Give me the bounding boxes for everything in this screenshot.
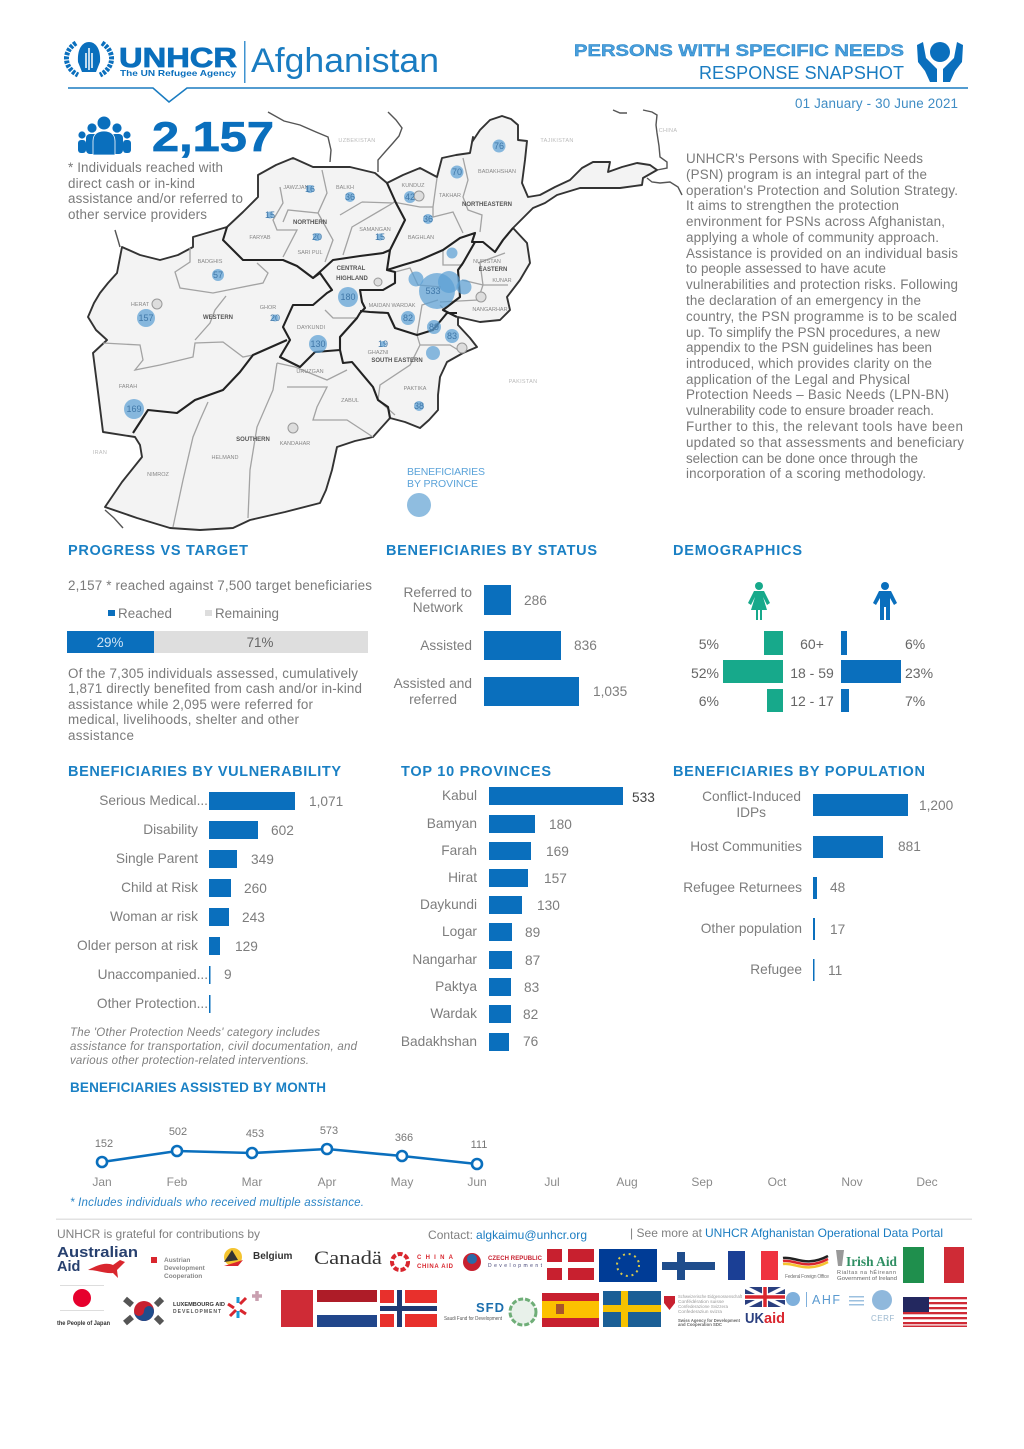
key figure note: direct cash or in-kind: [68, 176, 195, 191]
chart: beneficiaries assisted by month: 111: [471, 1139, 487, 1151]
chart: demographics: [673, 543, 933, 712]
chart footnote: * Includes individuals who received multiple assistance.: [70, 1197, 364, 1209]
progress bar: [67, 631, 368, 653]
chart: demographics: DEMOGRAPHICS: [673, 543, 802, 559]
map labels: 82: [403, 313, 413, 323]
map labels: PAKTIKA: [404, 386, 427, 392]
map labels: NIMROZ: [147, 472, 169, 478]
logo: Irish Aid: Rialtas na hÉireann: [837, 1269, 896, 1276]
map labels: URUZGAN: [296, 369, 324, 375]
map labels: 83: [447, 331, 457, 341]
chart: beneficiaries assisted by month: [70, 1080, 938, 1209]
header: [66, 41, 968, 111]
footer text: | See more at: [630, 1226, 703, 1240]
flag: EU: [599, 1249, 657, 1282]
map labels: 15: [375, 232, 385, 242]
chart: beneficiaries by population: [673, 764, 954, 981]
flag: USA: [903, 1297, 967, 1327]
map labels: 130: [310, 339, 326, 349]
icon: female: [748, 582, 770, 620]
map labels: 20: [312, 232, 322, 242]
chart: beneficiaries assisted by month: May: [391, 1175, 413, 1189]
logo: Swiss cooperation: Confédération suisse: [678, 1299, 725, 1304]
chart: top 10 provinces: TOP 10 PROVINCES: [401, 764, 551, 780]
chart: beneficiaries assisted by month: Apr: [318, 1175, 336, 1189]
logo: Austrian Development Cooperation: Cooperation: [164, 1273, 202, 1280]
intro paragraph: incorporation of a scoring methodology.: [686, 466, 926, 481]
chart: beneficiaries by vulnerability: 243: [242, 910, 265, 925]
footer text: UNHCR is grateful for contributions by: [57, 1227, 260, 1241]
chart: beneficiaries by population: Other population: [701, 921, 802, 936]
intro paragraph: It aims to strengthen the protection: [686, 198, 899, 213]
logo: Germany: [783, 1256, 829, 1280]
map labels: SAMANGAN: [359, 227, 391, 233]
chart: demographics: 23%: [905, 665, 933, 681]
logo: Australian Aid: Australian: [57, 1245, 138, 1261]
chart: beneficiaries assisted by month: Oct: [768, 1175, 787, 1189]
chart: demographics: 6%: [699, 693, 719, 709]
panel: progress vs target: 2,157 * reached against 7,500 target beneficiaries: [68, 578, 372, 593]
logo: Luxembourg aid: DEVELOPMENT: [173, 1309, 221, 1315]
intro paragraph: applying a whole of community approach.: [686, 230, 939, 245]
map labels: TAJIKISTAN: [540, 138, 574, 144]
map labels: JAWZJAN: [283, 185, 309, 191]
logo: Saudi Fund for Development: SFD: [476, 1300, 505, 1315]
chart: beneficiaries assisted by month: 453: [246, 1128, 264, 1140]
flag: Norway: [380, 1290, 437, 1327]
chart: top 10 provinces: 169: [546, 844, 569, 859]
intro paragraph: introduced, which provides clarity on the: [686, 356, 932, 371]
footer text: algkaimu@unhcr.org: [476, 1228, 587, 1242]
map labels: GHAZNI: [368, 350, 389, 356]
panel: progress vs target: [67, 543, 372, 743]
chart: beneficiaries assisted by month: Jul: [544, 1175, 560, 1189]
progress bar: 71%: [247, 635, 273, 650]
chart: beneficiaries by population: 48: [830, 880, 846, 895]
logo: UK aid: aid: [764, 1310, 785, 1327]
map labels: 76: [494, 141, 504, 151]
chart: beneficiaries by status: 286: [524, 593, 547, 608]
chart: demographics: 52%: [691, 665, 719, 681]
chart: beneficiaries by vulnerability: Single Parent: [116, 851, 198, 866]
logo: Austrian Development Cooperation: Development: [164, 1265, 206, 1272]
UNHCR wordmark: UNHCR: [119, 42, 237, 73]
report title: PERSONS WITH SPECIFIC NEEDS: [574, 41, 904, 60]
map labels: 20: [270, 313, 280, 323]
intro paragraph: updated so that assessments and beneficiary: [686, 435, 964, 450]
intro paragraph: Assistance is provided on an individual basis: [686, 246, 958, 261]
chart: beneficiaries assisted by month: Jan: [92, 1175, 112, 1189]
logo: Swiss cooperation: and Cooperation SDC: [678, 1322, 723, 1327]
report title: RESPONSE SNAPSHOT: [699, 63, 904, 83]
chart: beneficiaries by vulnerability: 349: [251, 852, 274, 867]
chart: beneficiaries by vulnerability: 1,071: [309, 794, 343, 809]
chart: beneficiaries by population: 17: [830, 922, 845, 937]
map labels: 19: [378, 339, 388, 349]
chart: beneficiaries by population: Conflict-Induced: [702, 789, 801, 804]
map labels: MAIDAN WARDAK: [369, 303, 416, 309]
chart: top 10 provinces: Badakhshan: [401, 1034, 477, 1049]
intro paragraph: application of the Legal and Physical: [686, 372, 910, 387]
chart: beneficiaries by population: Refugee Returnees: [683, 880, 802, 895]
chart: beneficiaries by status: 836: [574, 638, 597, 653]
logo: Germany: Federal Foreign Office: [785, 1274, 829, 1280]
logo: Belgium: Belgium: [253, 1251, 293, 1262]
logo: UK aid: UK: [745, 1310, 764, 1327]
intro paragraph: [686, 151, 964, 481]
map labels: DAYKUNDI: [297, 325, 325, 331]
progress note: Of the 7,305 individuals assessed, cumulatively: [68, 666, 358, 681]
logo: Luxembourg aid: [173, 1291, 262, 1318]
logo: Australian Aid: [57, 1245, 138, 1278]
intro paragraph: vulnerability code to ensure broader reach.: [686, 403, 934, 418]
chart: beneficiaries by vulnerability: BENEFICIARIES BY VULNERABILITY: [68, 764, 341, 780]
UNHCR wordmark: The UN Refugee Agency: [120, 68, 236, 78]
chart: demographics: 5%: [699, 636, 719, 652]
map labels: NORTHEASTERN: [462, 202, 512, 208]
date: 01 January - 30 June 2021: [795, 96, 958, 111]
progress note: medical, livelihoods, shelter and other: [68, 712, 300, 727]
map labels: NURISTAN: [473, 259, 501, 265]
chart: beneficiaries assisted by month: Feb: [167, 1175, 188, 1189]
logo: Irish Aid: Government of Ireland: [837, 1276, 897, 1282]
chart: beneficiaries by population: BENEFICIARIES BY POPULATION: [673, 764, 925, 780]
map labels: 70: [452, 167, 462, 177]
chart: demographics: 60+: [800, 636, 824, 652]
chart: beneficiaries by status: 1,035: [593, 684, 628, 699]
chart: beneficiaries assisted by month: Nov: [841, 1175, 863, 1189]
key figure: people reached: [68, 113, 274, 222]
logo: Luxembourg aid: LUXEMBOURG AID: [173, 1302, 225, 1308]
chart: beneficiaries by vulnerability: Woman ar risk: [110, 909, 198, 924]
logo: Swiss cooperation: Schweizerische Eidgenossenschaft: [678, 1294, 743, 1299]
chart: top 10 provinces: Hirat: [448, 870, 477, 885]
progress note: [68, 666, 362, 743]
progress note: assistance while 2,095 were referred for: [68, 697, 314, 712]
chart: top 10 provinces: 83: [524, 980, 540, 995]
logo: CERF: [871, 1290, 895, 1323]
map labels: 180: [340, 292, 356, 302]
chart: top 10 provinces: Wardak: [430, 1006, 477, 1021]
chart: top 10 provinces: Bamyan: [427, 816, 477, 831]
chart: beneficiaries by status: Assisted: [420, 638, 472, 653]
chart: top 10 provinces: 157: [544, 871, 567, 886]
chart: beneficiaries assisted by month: 366: [395, 1132, 413, 1144]
logo: Czech Republic: Development: [488, 1263, 543, 1269]
key figure: people reached: 2,157: [152, 113, 274, 160]
chart: beneficiaries by status: referred: [409, 692, 457, 707]
chart: top 10 provinces: 76: [523, 1034, 539, 1049]
intro paragraph: selection can be done once through the: [686, 451, 918, 466]
donor logos: [57, 1245, 967, 1327]
vulnerability note: The 'Other Protection Needs' category includes: [70, 1027, 320, 1039]
map labels: NORTHERN: [293, 220, 327, 226]
chart: top 10 provinces: Logar: [442, 924, 477, 939]
chart: demographics: 6%: [905, 636, 925, 652]
flag: France: [728, 1251, 778, 1280]
intro paragraph: vulnerabilities and protection risks. Following: [686, 277, 958, 292]
panel: progress vs target: Remaining: [215, 606, 279, 621]
chart: top 10 provinces: 533: [632, 790, 655, 805]
intro paragraph: country, the PSN programme is to be scaled: [686, 309, 957, 324]
logo: Korea: [125, 1299, 162, 1323]
icon: protecting hands: [917, 42, 963, 82]
logo: Swiss cooperation: Confederazione Svizzera: [678, 1304, 728, 1309]
intro paragraph: the declaration of an emergency in the: [686, 293, 921, 308]
logo: Irish Aid: [836, 1250, 897, 1282]
flag: Spain: [542, 1293, 599, 1327]
chart: top 10 provinces: 130: [537, 898, 560, 913]
chart: beneficiaries by population: IDPs: [736, 805, 766, 820]
UNHCR emblem: [66, 42, 112, 75]
chart: beneficiaries assisted by month: Dec: [916, 1175, 938, 1189]
map labels: IRAN: [93, 450, 107, 456]
chart: beneficiaries assisted by month: BENEFICIARIES ASSISTED BY MONTH: [70, 1080, 326, 1095]
icon: male: [873, 582, 897, 620]
chart: beneficiaries by population: Host Communities: [690, 839, 802, 854]
chart: demographics: 12 - 17: [790, 693, 834, 709]
chart: beneficiaries by vulnerability: 602: [271, 823, 294, 838]
map labels: CHINA: [659, 128, 677, 134]
logo: Irish Aid: Irish Aid: [846, 1255, 897, 1270]
footer text: [57, 1226, 943, 1242]
chart: top 10 provinces: 89: [525, 925, 540, 940]
map labels: UZBEKISTAN: [338, 138, 376, 144]
progress bar: 29%: [97, 635, 123, 650]
intro paragraph: to people assessed to have acute: [686, 261, 886, 276]
map legend: BY PROVINCE: [407, 478, 478, 490]
map labels: ZABUL: [341, 398, 359, 404]
chart: top 10 provinces: Kabul: [442, 788, 477, 803]
chart: beneficiaries by vulnerability: 9: [224, 967, 232, 982]
chart: beneficiaries by vulnerability: Disability: [143, 822, 198, 837]
map labels: [93, 128, 677, 478]
logo: Japan: the People of Japan: [57, 1320, 110, 1327]
province boundaries: [103, 158, 508, 527]
chart: beneficiaries assisted by month: 573: [320, 1125, 338, 1137]
map labels: KANDAHAR: [280, 441, 310, 447]
logo: Canada: Canadä: [314, 1248, 383, 1269]
chart: beneficiaries by vulnerability: Other Protection...: [97, 996, 208, 1011]
logo: China Aid: CHINA: [417, 1255, 454, 1261]
map labels: 57: [213, 270, 223, 280]
chart: beneficiaries assisted by month: 152: [95, 1138, 113, 1150]
logo: Belgium: [224, 1248, 293, 1266]
map labels: 36: [345, 192, 355, 202]
logo: Austrian Development Cooperation: [151, 1257, 206, 1280]
map labels: SARI PUL: [297, 250, 323, 256]
intro paragraph: appendix to the PSN guidelines has been: [686, 340, 932, 355]
logo: Japan: [57, 1285, 110, 1327]
map labels: HERAT: [131, 302, 150, 308]
key figure note: [68, 160, 243, 222]
chart: beneficiaries by status: [386, 543, 628, 707]
map labels: HIGHLAND: [336, 276, 368, 282]
chart: beneficiaries assisted by month: 502: [169, 1126, 187, 1138]
map labels: BALKH: [336, 185, 354, 191]
logo: Austrian Development Cooperation: Austrian: [164, 1257, 190, 1264]
chart: beneficiaries by vulnerability: Serious Medical...: [99, 793, 208, 808]
chart: top 10 provinces: 87: [525, 953, 540, 968]
map labels: BADAKHSHAN: [478, 169, 516, 175]
intro paragraph: environment for PSNs across Afghanistan,: [686, 214, 945, 229]
map labels: KUNAR: [492, 278, 512, 284]
intro paragraph: up. To simplify the PSN procedures, a new: [686, 325, 940, 340]
vulnerability note: [70, 1027, 358, 1067]
map labels: TAKHAR: [439, 193, 461, 199]
intro paragraph: Protection Needs – Basic Needs (LPN-BN): [686, 387, 949, 402]
intro paragraph: operation's Protection and Solution Strategy.: [686, 183, 958, 198]
chart: beneficiaries by population: 1,200: [919, 798, 954, 813]
neighbouring borders: [105, 110, 682, 528]
map labels: CENTRAL: [337, 266, 366, 272]
chart: top 10 provinces: Daykundi: [420, 897, 477, 912]
map labels: NANGARHAR: [472, 307, 508, 313]
logo: AHF: [786, 1292, 864, 1307]
map labels: GHOR: [260, 305, 276, 311]
footer text: Contact:: [428, 1228, 473, 1242]
map labels: 16: [305, 184, 315, 194]
map labels: 42: [405, 192, 415, 202]
map of Afghanistan: [88, 110, 682, 530]
flag: Sweden: [603, 1291, 661, 1327]
map labels: 533: [425, 286, 441, 296]
chart: top 10 provinces: Paktya: [435, 979, 477, 994]
logo: Swiss cooperation: Confederaziun svizra: [678, 1309, 723, 1314]
flag: Italy: [903, 1247, 964, 1283]
panel: progress vs target: Reached: [118, 606, 172, 621]
map legend: [407, 466, 485, 517]
beneficiary bubbles: [124, 140, 506, 433]
logo: AHF: AHF: [812, 1293, 842, 1307]
logo: CERF: CERF: [871, 1314, 895, 1323]
chart: top 10 provinces: 82: [523, 1007, 538, 1022]
key figure note: other service providers: [68, 207, 207, 222]
chart: beneficiaries by vulnerability: Older person at risk: [77, 938, 198, 953]
chart: top 10 provinces: Nangarhar: [412, 952, 477, 967]
logo: Swiss cooperation: Swiss Agency for Development: [678, 1318, 740, 1323]
flag: Netherlands: [317, 1290, 377, 1327]
chart: beneficiaries assisted by month: Aug: [616, 1175, 638, 1189]
map labels: 169: [126, 404, 142, 414]
chart: beneficiaries by vulnerability: Child at Risk: [121, 880, 198, 895]
report title: [574, 41, 904, 83]
chart: beneficiaries assisted by month: Sep: [691, 1175, 713, 1189]
chart: beneficiaries by vulnerability: [68, 764, 358, 1067]
map labels: HELMAND: [212, 455, 238, 461]
map labels: 15: [265, 210, 275, 220]
map labels: PAKISTAN: [509, 379, 537, 385]
logo: China Aid: CHINA AID: [417, 1264, 454, 1270]
intro paragraph: Further to this, the relevant tools have been: [686, 419, 963, 434]
flag: Monaco: [281, 1290, 313, 1327]
map labels: 157: [138, 313, 154, 323]
vulnerability note: assistance for transportation, civil documentation, and: [70, 1041, 358, 1053]
map labels: FARAH: [119, 384, 137, 390]
chart: beneficiaries by vulnerability: Unaccompanied...: [98, 967, 208, 982]
logo: Swiss cooperation: [664, 1294, 743, 1327]
map labels: 36: [423, 214, 433, 224]
vulnerability note: various other protection-related interventions.: [70, 1055, 309, 1067]
intro paragraph: UNHCR's Persons with Specific Needs: [686, 151, 923, 166]
chart: beneficiaries by status: Referred to: [404, 585, 472, 600]
logo: Czech Republic: [463, 1253, 543, 1271]
map labels: SOUTH EASTERN: [371, 358, 423, 364]
chart: beneficiaries by status: Network: [413, 600, 463, 615]
map labels: BADGHIS: [198, 259, 223, 265]
chart: beneficiaries by population: 881: [898, 839, 921, 854]
key figure note: * Individuals reached with: [68, 160, 223, 175]
chart: top 10 provinces: [401, 764, 655, 1051]
key figure note: assistance and/or referred to: [68, 191, 243, 206]
chart: top 10 provinces: Farah: [441, 843, 477, 858]
map legend: BENEFICIARIES: [407, 466, 485, 478]
intro paragraph: (PSN) program is an integral part of the: [686, 167, 927, 182]
region boundaries: [133, 183, 513, 433]
map labels: BAGHLAN: [408, 235, 434, 241]
country fill: [88, 116, 657, 530]
chart: beneficiaries by vulnerability: 129: [235, 939, 258, 954]
logo: Czech Republic: CZECH REPUBLIC: [488, 1256, 543, 1262]
chart: top 10 provinces: 180: [549, 817, 572, 832]
country title: Afghanistan: [251, 42, 439, 80]
logo: UK aid: [745, 1287, 785, 1327]
map labels: 38: [414, 401, 424, 411]
chart: beneficiaries assisted by month: Jun: [467, 1175, 487, 1189]
chart: beneficiaries by status: BENEFICIARIES BY STATUS: [386, 543, 597, 559]
chart: demographics: 7%: [905, 693, 925, 709]
chart: beneficiaries by population: 11: [828, 963, 842, 978]
logo: China Aid: [392, 1254, 454, 1270]
chart: beneficiaries by population: Refugee: [750, 962, 802, 977]
chart: beneficiaries assisted by month: Mar: [242, 1175, 262, 1189]
chart: beneficiaries by vulnerability: 260: [244, 881, 267, 896]
flag: Finland: [662, 1252, 715, 1280]
map labels: EASTERN: [479, 267, 507, 273]
map labels: SOUTHERN: [236, 437, 270, 443]
logo: Australian Aid: Aid: [57, 1259, 80, 1275]
map labels: FARYAB: [249, 235, 271, 241]
progress note: assistance: [68, 728, 134, 743]
map labels: WESTERN: [203, 315, 233, 321]
footer text: UNHCR Afghanistan Operational Data Portal: [705, 1226, 943, 1240]
icon: people group: [78, 116, 131, 155]
progress note: 1,871 directly benefited from cash and/or in-kind: [68, 681, 362, 696]
logo: Saudi Fund for Development: [444, 1299, 536, 1325]
map labels: 89: [429, 322, 439, 332]
flag: Denmark: [547, 1249, 594, 1280]
logo: Saudi Fund for Development: Saudi Fund for Development: [444, 1316, 503, 1322]
panel: progress vs target: PROGRESS VS TARGET: [68, 543, 248, 559]
map labels: KUNDUZ: [402, 183, 425, 189]
chart: demographics: 18 - 59: [790, 665, 834, 681]
chart: beneficiaries by status: Assisted and: [394, 676, 472, 691]
